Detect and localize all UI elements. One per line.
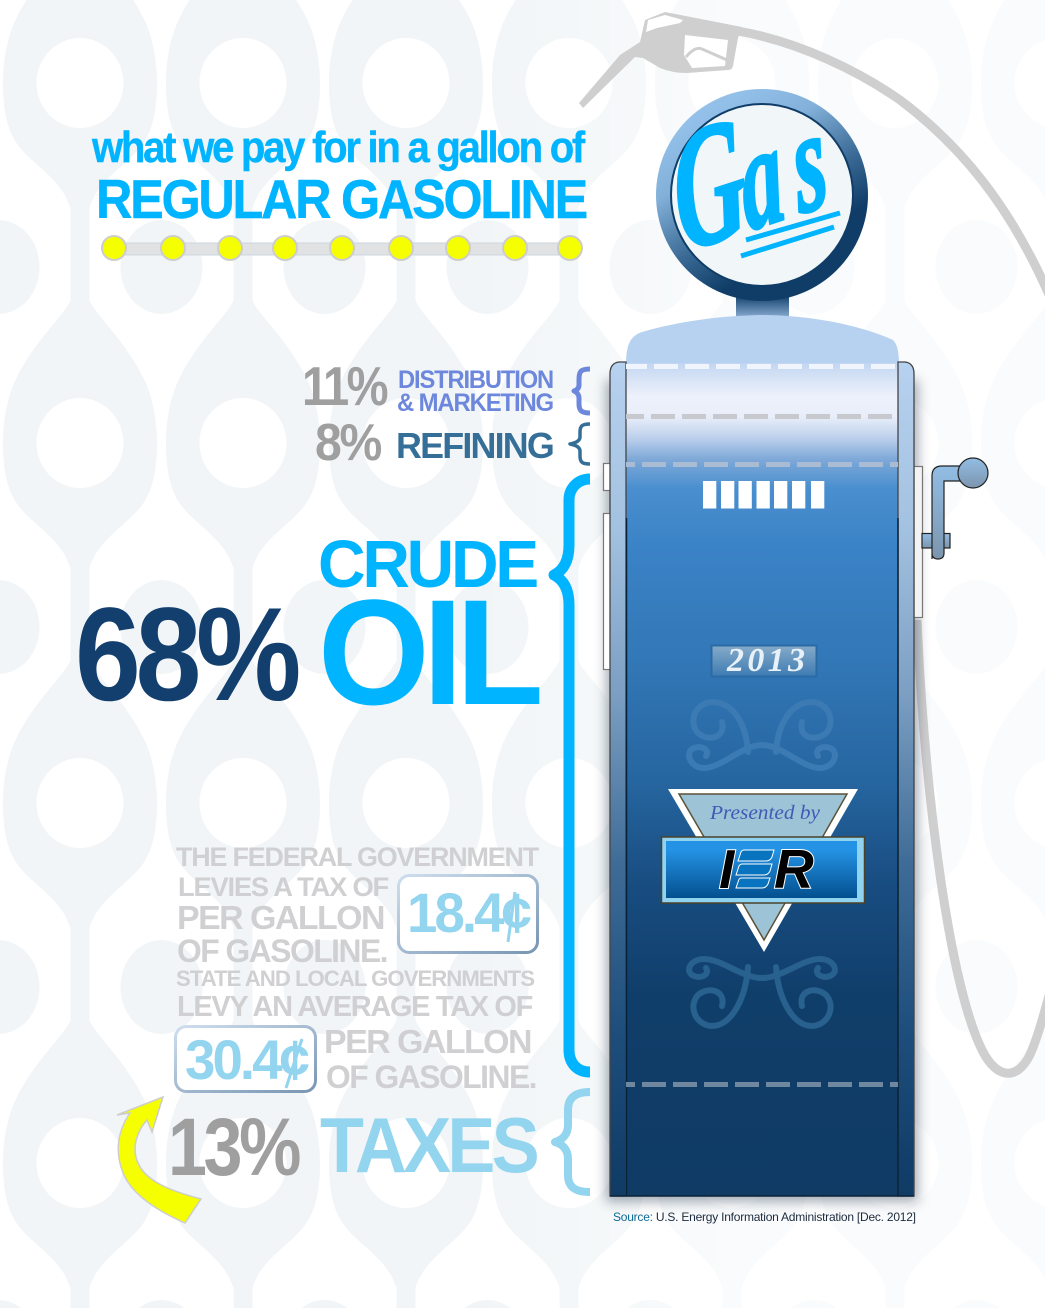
logo: presented by IER: Presented by (709, 802, 820, 824)
pump side tabs (604, 464, 922, 670)
icon: fuel hose lower loop (917, 620, 1045, 1073)
text block: federal tax (176, 842, 540, 969)
label: 11% distribution and marketing: & MARKETING (397, 389, 553, 417)
gas pump (604, 50, 988, 1202)
logo: presented by IER: I (719, 838, 736, 900)
text block: state and local tax: PER GALLON (324, 1023, 531, 1060)
arrow: yellow curved (117, 1097, 201, 1223)
logo: presented by IER (662, 789, 864, 952)
pump dome (626, 315, 899, 365)
logo: presented by IER: R (774, 838, 814, 900)
title (91, 123, 587, 230)
price window (703, 481, 824, 508)
callout: 30.4 cents: 30.4¢ (185, 1028, 309, 1091)
year plate: 2013 (726, 642, 805, 679)
label: 68% crude oil: CRUDE (318, 527, 538, 602)
text block: federal tax: LEVIES A TAX OF (178, 872, 389, 902)
label: 11% distribution and marketing: DISTRIBUTION (398, 366, 553, 394)
text block: state and local tax (176, 966, 536, 1095)
icon: fuel nozzle and hose (579, 12, 1045, 297)
text block: state and local tax: STATE AND LOCAL GOVERNMENTS (176, 966, 534, 991)
ornament: upper scroll (689, 702, 835, 768)
label: 11% distribution and marketing: 11% (302, 355, 388, 417)
sign: Gas globe: Gas (661, 50, 849, 289)
dotted divider (102, 236, 582, 260)
label: 68% crude oil: OIL (318, 568, 540, 736)
label: 13% taxes: 13% (168, 1102, 300, 1193)
label: 8% refining: 8% (315, 414, 381, 472)
text block: state and local tax: OF GASOLINE. (326, 1059, 536, 1095)
pump shadow (606, 380, 918, 1202)
text block: federal tax: PER GALLON (177, 899, 384, 936)
label: 11% distribution and marketing (302, 355, 590, 417)
label: 8% refining (315, 414, 590, 472)
label: 13% taxes: TAXES (320, 1101, 537, 1189)
title: what we pay for in a gallon of (91, 123, 586, 172)
callout: 18.4 cents: 18.4¢ (407, 881, 531, 944)
label: 68% crude oil: 68% (75, 581, 298, 729)
text block: federal tax: THE FEDERAL GOVERNMENT (176, 842, 540, 872)
dashed level lines (626, 366, 898, 1084)
pump neck (736, 295, 789, 317)
source note: Source: U.S. Energy Information Administration [Dec. 2012] (613, 1210, 916, 1224)
text block: federal tax: OF GASOLINE. (177, 933, 387, 969)
title: REGULAR GASOLINE (96, 168, 587, 230)
pump handle (922, 458, 988, 559)
label: 68% crude oil (75, 479, 590, 1072)
ornament: lower scroll (689, 959, 835, 1026)
text block: state and local tax: LEVY AN AVERAGE TAX OF (177, 991, 533, 1023)
pump side columns (610, 362, 914, 1196)
label: 13% taxes (168, 1092, 590, 1193)
label: 8% refining: REFINING (396, 425, 553, 466)
pump body (626, 363, 898, 1196)
